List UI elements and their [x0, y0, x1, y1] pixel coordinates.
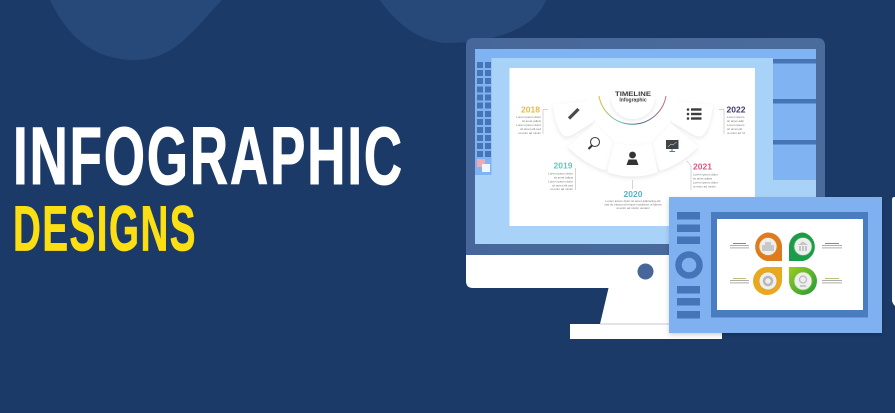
label 2018: sit amet elit sed [520, 127, 541, 131]
screen top bar [475, 49, 816, 58]
timeline heading: TIMELINE [615, 91, 652, 98]
label 2021: 2021 [693, 162, 712, 172]
label 2018: Lorem ipsum dolor [516, 115, 541, 119]
tablet body [669, 197, 882, 333]
cropped white card at right edge [892, 197, 895, 306]
centre hub [588, 92, 678, 140]
label 2019 [548, 160, 576, 191]
label 2020: 2020 [624, 189, 643, 199]
tablet text top right [822, 243, 842, 248]
coloured arc [599, 96, 666, 124]
tablet text bottom left [730, 278, 749, 283]
left toolbar [475, 58, 492, 175]
monitor [466, 38, 825, 339]
tablet text bottom right [822, 278, 842, 283]
tile: orange [755, 232, 782, 261]
segment 2019 [568, 123, 615, 170]
tablet dial [678, 254, 700, 276]
label 2018: sit amet adipis [522, 119, 541, 123]
segment 2022 [666, 100, 713, 136]
segment 2020 [607, 142, 658, 176]
tile: green [789, 232, 815, 261]
label 2019: sit amet adipis [554, 176, 573, 180]
label 2020: Lorem ipsum dolor sit amet adipiscing elit [605, 199, 661, 203]
subtitle: DESIGNS: DESIGNS [13, 192, 197, 264]
tablet screen [717, 219, 863, 310]
tile: yellow [753, 267, 782, 295]
timeline subheading: Infographic [619, 98, 647, 104]
label 2021: Lorem ipsum dolor [693, 172, 718, 176]
label 2022: ut enim ad mi [727, 131, 745, 135]
tablet side buttons bottom [677, 286, 700, 318]
label 2022: 2022 [727, 104, 746, 114]
power button [638, 264, 654, 280]
screen [475, 49, 816, 244]
segment 2018 [553, 100, 600, 136]
label 2019: ut enim ad minim [550, 187, 573, 191]
background blob right [380, 0, 546, 43]
title: INFOGRAPHIC: INFOGRAPHIC [13, 111, 404, 202]
label 2018: Lorem ipsum dolor [516, 123, 541, 127]
label 2020 [604, 180, 662, 210]
label 2018 [516, 104, 548, 135]
label 2022: sit amet adip [727, 119, 744, 123]
label 2022: Lorem ipsum [727, 123, 745, 127]
tablet [669, 197, 882, 333]
label 2020: ut enim ad minim veniam [616, 206, 650, 210]
icon: list [687, 108, 702, 120]
monitor bezel [466, 38, 825, 255]
icon: presentation board [666, 140, 678, 152]
inner semicircle [611, 97, 655, 119]
label 2021: Lorem ipsum dolor [693, 180, 718, 184]
label 2021: ut enim ad minim [693, 184, 716, 188]
label 2020: sed do eiusmod tempor incididunt ut labore [604, 202, 662, 206]
icon: magnifier [588, 138, 600, 149]
label 2019: Lorem ipsum dolor [548, 180, 573, 184]
tablet side buttons top [677, 212, 700, 244]
monitor chin [466, 255, 760, 288]
tablet screen frame [711, 212, 868, 318]
label 2019: 2019 [554, 160, 573, 170]
label 2018: 2018 [521, 104, 540, 114]
label 2021: sit amet adipis [693, 176, 713, 180]
right panels [773, 58, 816, 180]
label 2019: Lorem ipsum dolor [548, 172, 573, 176]
label 2019: sit amet elit sed [552, 184, 573, 188]
tile: lime [789, 267, 817, 295]
label 2022: sit amet elit [727, 127, 742, 131]
tablet text top left [730, 243, 749, 248]
label 2022 [719, 104, 746, 135]
icon: pencil [569, 109, 578, 118]
label 2022: Lorem ipsum [727, 115, 745, 119]
icon: person [626, 152, 638, 165]
background blob left [50, 0, 222, 60]
timeline document [510, 68, 755, 226]
label 2018: ut enim ad minim [518, 131, 541, 135]
segment 2021 [651, 123, 698, 170]
label 2021 [687, 161, 718, 190]
monitor stand [570, 286, 722, 339]
